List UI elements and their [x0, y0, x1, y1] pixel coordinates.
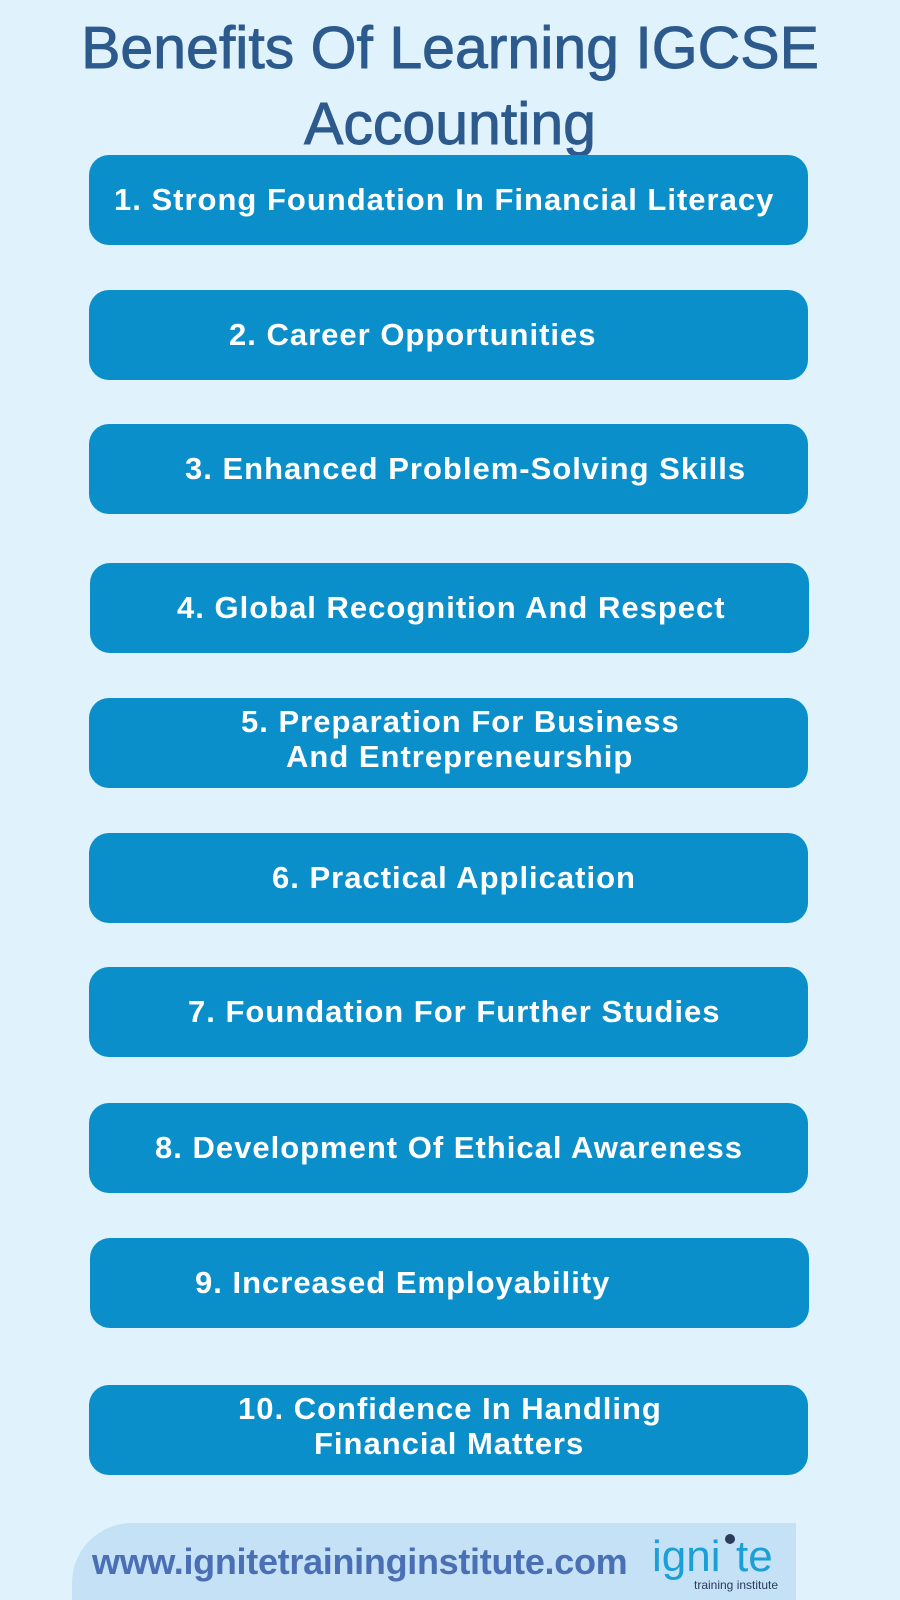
panel: benefit 9	[90, 1238, 809, 1328]
panel: benefit 5	[89, 698, 808, 788]
footer	[72, 1523, 796, 1600]
logo	[652, 1532, 778, 1592]
panel: benefit 8: 8. Development Of Ethical Awareness	[155, 1130, 743, 1165]
panel: benefit 1: 1. Strong Foundation In Financial Literacy	[114, 182, 774, 217]
panel: benefit 4: 4. Global Recognition And Respect	[177, 590, 726, 625]
panel: benefit 7: 7. Foundation For Further Studies	[188, 994, 720, 1029]
panel: benefit 2	[89, 290, 808, 380]
title: Accounting	[304, 91, 596, 157]
panel: benefit 10: 10. Confidence In Handling	[238, 1391, 662, 1426]
panel: benefit 6	[89, 833, 808, 923]
panel: benefit 5: 5. Preparation For Business	[241, 704, 680, 739]
panel: benefit 8	[89, 1103, 808, 1193]
logo: igni	[652, 1532, 720, 1581]
panel: benefit 7	[89, 967, 808, 1057]
panel: benefit 6: 6. Practical Application	[272, 860, 636, 895]
title: Benefits Of Learning IGCSE	[81, 15, 819, 81]
logo: training institute	[694, 1578, 778, 1592]
website url: www.ignitetraininginstitute.com	[92, 1541, 627, 1582]
title	[81, 15, 819, 157]
panel: benefit 4	[90, 563, 809, 653]
panel: benefit 1	[89, 155, 808, 245]
logo: te	[736, 1532, 773, 1581]
panel: benefit 5: And Entrepreneurship	[286, 739, 633, 774]
panel: benefit 9: 9. Increased Employability	[195, 1265, 610, 1300]
panel: benefit 10: Financial Matters	[314, 1426, 584, 1461]
panel: benefit 3: 3. Enhanced Problem-Solving Skills	[185, 451, 746, 486]
panel: benefit 3	[89, 424, 808, 514]
panel: benefit 2: 2. Career Opportunities	[229, 317, 597, 352]
panel: benefit 10	[89, 1385, 808, 1475]
